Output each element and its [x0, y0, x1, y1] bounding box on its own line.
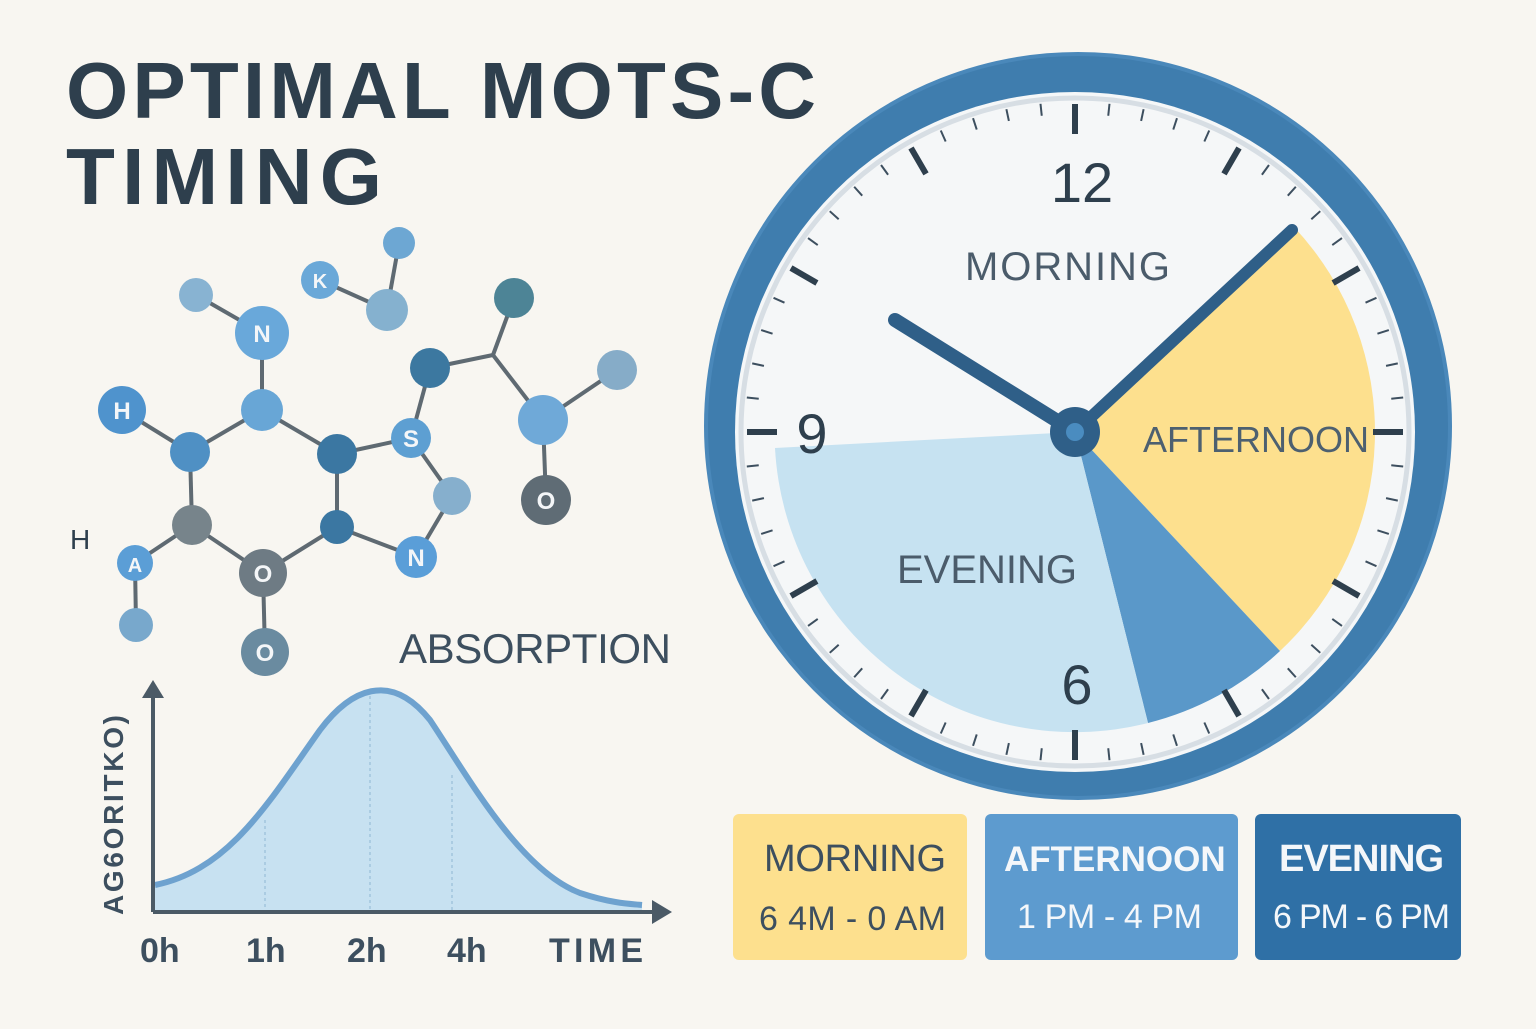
absorption chart: 2h: [347, 932, 387, 970]
molecule diagram: O: [256, 640, 274, 667]
molecule diagram: A: [128, 555, 142, 577]
legend: evening: [1255, 814, 1461, 960]
absorption chart: 4h: [447, 932, 487, 970]
molecule diagram: H: [70, 524, 90, 555]
absorption chart: 0h: [140, 932, 180, 970]
molecule diagram: H: [113, 398, 131, 425]
clock numerals: [796, 151, 1113, 716]
molecule diagram: N: [407, 545, 425, 572]
clock sector: afternoon: [1075, 227, 1375, 651]
absorption chart: [98, 680, 672, 970]
absorption label: ABSORPTION: [399, 625, 671, 672]
clock sector: dark blue: [1075, 432, 1280, 723]
clock period labels: EVENING: [897, 548, 1077, 592]
ticks: [747, 104, 1403, 760]
legend: afternoon: AFTERNOON: [1004, 840, 1226, 879]
legend: morning: [733, 814, 967, 960]
title: [66, 46, 816, 221]
clock center: [1050, 407, 1100, 457]
absorption chart: AG6ORITKO): [98, 715, 129, 915]
title: TIMING: [66, 132, 382, 221]
clock numerals: 9: [796, 402, 828, 465]
clock period labels: MORNING: [965, 245, 1170, 289]
molecule diagram: K: [313, 271, 328, 293]
clock period labels: AFTERNOON: [1143, 419, 1369, 460]
clock numerals: 6: [1061, 653, 1093, 716]
molecule diagram: O: [537, 488, 555, 515]
clock period labels: [897, 245, 1369, 592]
legend: morning: 6 4M - 0 AM: [759, 900, 946, 938]
legend: evening: EVENING: [1279, 838, 1444, 880]
clock numerals: 12: [1051, 151, 1113, 214]
legend: morning: MORNING: [764, 838, 946, 880]
title: OPTIMAL MOTS-C: [66, 46, 816, 135]
molecule diagram: [70, 227, 637, 676]
clock hands: [895, 230, 1292, 432]
clock: [706, 54, 1450, 798]
molecule diagram: S: [403, 426, 419, 453]
molecule diagram: N: [253, 321, 271, 348]
legend: afternoon: [985, 814, 1238, 960]
molecule diagram: O: [254, 561, 272, 588]
clock sector: evening: [775, 432, 1148, 732]
absorption chart: 1h: [246, 932, 286, 970]
legend: afternoon: 1 PM - 4 PM: [1017, 898, 1202, 936]
legend: evening: 6 PM - 6 PM: [1273, 898, 1450, 936]
absorption chart: TIME: [549, 932, 643, 970]
